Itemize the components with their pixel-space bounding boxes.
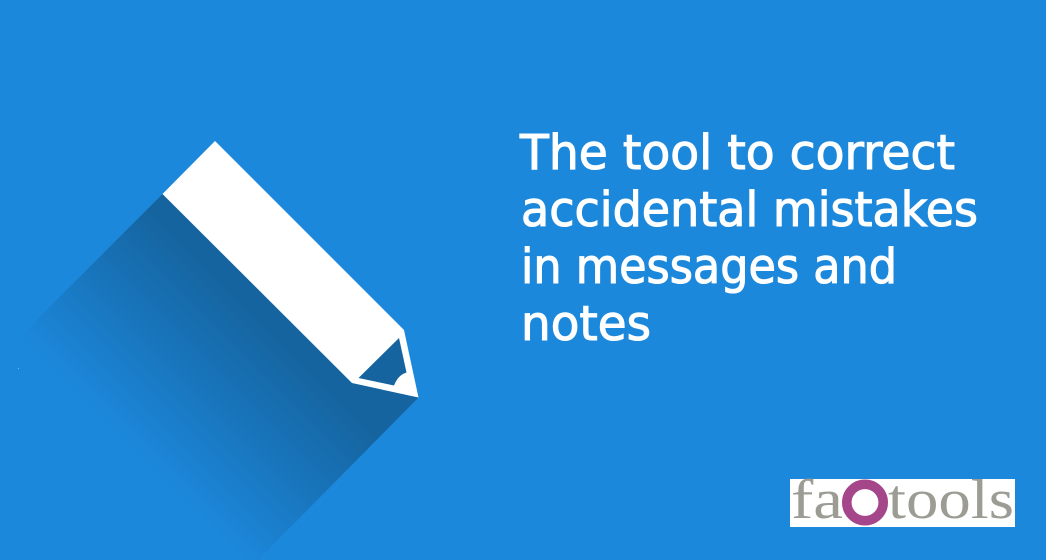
icon: pencil	[162, 141, 418, 398]
long shadow of pencil	[0, 194, 418, 560]
heading line 1: The tool to correct	[519, 125, 955, 181]
pencil tip inner cut-out	[358, 338, 406, 386]
logo text tools: tools	[888, 469, 1014, 531]
heading line 3: in messages and	[521, 239, 897, 295]
heading line 4: notes	[521, 296, 651, 352]
logo text fa: fa	[791, 469, 843, 531]
small speck	[18, 368, 19, 369]
heading	[519, 125, 978, 352]
pencil body and tip	[162, 141, 418, 398]
logo white background	[790, 479, 1015, 527]
heading line 2: accidental mistakes	[521, 182, 978, 238]
logo ring	[847, 484, 883, 521]
logo: faOtools	[790, 469, 1015, 531]
